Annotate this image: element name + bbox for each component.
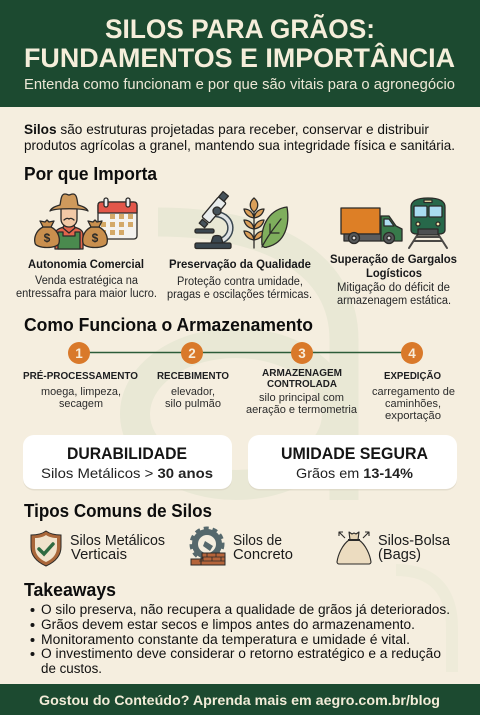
heading: Takeaways: Takeaways [24,580,116,600]
step 1: moega, limpeza, [41,386,121,398]
card title: Autonomia Comercial [28,257,144,271]
takeaways list: Grãos devem estar secos e limpos antes do armazenamento. [41,617,415,632]
label: Silos Metálicos [70,533,165,549]
panel: Preservação da Qualidade [167,192,312,301]
title: FUNDAMENTOS E IMPORTÂNCIA [24,43,455,73]
label: Verticais [71,547,127,563]
card text: Venda estratégica na [35,275,139,287]
label: Concreto [233,547,293,563]
panel: Autonomia Comercial: $ [44,231,51,245]
step 2: 2 [188,346,196,361]
takeaways list [30,602,450,676]
card: Umidade Segura: UMIDADE SEGURA [281,445,428,463]
step 4: carregamento de [372,386,455,398]
subtitle: Entenda como funcionam e por que são vitais para o agronegócio [24,76,455,93]
card text: entressafra para maior lucro. [16,288,157,300]
icon: wheat and leaf [244,198,288,248]
title: SILOS PARA GRÃOS: [105,14,375,44]
type: Silos-Bolsa [337,532,451,564]
label: (Bags) [378,547,421,563]
card title: Preservação da Qualidade [169,257,311,271]
step 4: 4 [408,346,416,361]
icon: train [409,198,447,248]
type: Silos de Concreto [191,528,293,565]
intro paragraph [24,121,455,153]
heading: Tipos Comuns de Silos: Tipos Comuns de Silos [24,501,212,521]
icon: gear and bricks [191,528,225,565]
step 2: RECEBIMENTO [157,371,229,382]
step 4: caminhões, [385,398,441,410]
card text: armazenagem estática. [337,295,451,307]
title [24,14,455,73]
label [378,533,451,563]
card text: Proteção contra umidade, [177,276,303,288]
step 1 [23,342,138,410]
step 3: silo principal com [259,392,344,404]
card text [337,282,451,307]
header banner [0,0,480,107]
icon: farmer with money bags and calendar [35,194,137,249]
intro paragraph: produtos agrícolas a granel, mantendo sua integridade física e sanitária. [24,137,455,153]
panel: Superação de Gargalos Logísticos [330,198,457,307]
step 1: PRÉ-PROCESSAMENTO [23,369,138,382]
card: Umidade Segura [248,435,457,490]
step 3: CONTROLADA [267,379,337,390]
intro paragraph: Silos são estruturas projetadas para receber, conservar e distribuir [24,121,429,137]
card title [330,252,457,280]
panel: Autonomia Comercial: $ [92,231,99,245]
card: Durabilidade: Silos Metálicos > 30 anos [41,465,213,481]
label: Silos-Bolsa [378,533,451,549]
icon: microscope [195,192,231,248]
card: Durabilidade: DURABILIDADE [67,445,187,463]
takeaways list: de custos. [41,661,102,676]
type: Silos Metálicos Verticais [31,531,165,566]
step 3: aeração e termometria [246,404,358,416]
step 3: ARMAZENAGEM [262,368,342,379]
process timeline [23,342,455,422]
card text [167,276,312,301]
panel: Autonomia Comercial [16,194,157,300]
takeaways list: Monitoramento constante da temperatura e umidade é vital. [41,632,410,647]
card text: pragas e oscilações térmicas. [167,289,312,301]
card title: Superação de Gargalos [330,252,457,266]
card text: Mitigação do déficit de [337,282,450,294]
step 2: elevador, [171,386,215,398]
step 2: silo pulmão [165,398,221,410]
step 4: exportação [385,410,441,422]
step 1: secagem [59,398,103,410]
icon: truck [341,208,402,244]
takeaways list: O silo preserva, não recupera a qualidade de grãos já deteriorados. [41,602,450,617]
icon: bag [337,532,371,564]
heading: Por que Importa: Por que Importa [24,164,158,184]
card: Umidade Segura: Grãos em 13-14% [296,465,414,481]
footer banner [0,684,480,715]
card: Durabilidade [23,435,232,490]
step 1: 1 [75,346,83,361]
step 3 [246,342,358,416]
label [233,533,293,563]
step 2 [157,342,229,410]
icon: shield [31,531,61,566]
step 3: 3 [298,346,306,361]
card text [16,275,157,300]
label [70,533,165,563]
step 4: EXPEDIÇÃO [384,369,441,382]
footer banner: Gostou do Conteúdo? Aprenda mais em aegro.com.br/blog [39,692,440,708]
step 4 [372,342,455,422]
heading: Como Funciona o Armazenamento: Como Funciona o Armazenamento [24,315,313,335]
takeaways list: O investimento deve considerar o retorno estratégico e a redução [41,646,441,661]
card title: Logísticos [366,266,422,280]
label: Silos de [233,533,282,549]
